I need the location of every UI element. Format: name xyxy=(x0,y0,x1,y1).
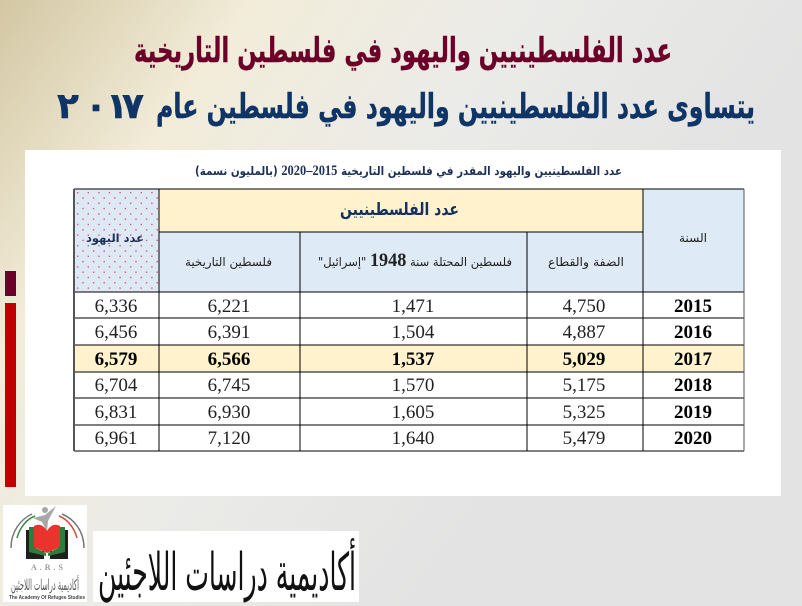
icon: open book xyxy=(26,525,68,559)
row 2018 xyxy=(95,375,712,396)
row 2017 highlighted: 6,566 xyxy=(208,349,250,370)
header cell: Jewish population xyxy=(74,189,159,292)
header cell: historic Palestine xyxy=(159,232,300,292)
row 2020: 6,961 xyxy=(95,428,137,449)
row 2016: 6,456 xyxy=(95,322,137,343)
row 2015: 4,750 xyxy=(563,296,605,317)
row 2020: 1,640 xyxy=(392,428,434,449)
row 2015: 6,336 xyxy=(95,296,137,317)
header cell: West Bank and Gaza: الضفة والقطاع xyxy=(548,255,624,270)
accent bar: maroon xyxy=(5,271,16,296)
row 2018: 1,570 xyxy=(392,375,434,396)
row 2017 highlighted: 2017 xyxy=(674,349,712,370)
row 2019: 5,325 xyxy=(563,402,605,423)
header cell: historic Palestine: فلسطين التاريخية xyxy=(185,255,272,270)
header cell: West Bank and Gaza xyxy=(527,232,643,292)
header cell: Jewish population: عدد اليهود xyxy=(86,231,144,246)
data table xyxy=(74,189,744,451)
row 2019: 6,831 xyxy=(95,402,137,423)
logo: academy emblem xyxy=(3,505,87,602)
title xyxy=(57,31,755,127)
row 2019: 6,930 xyxy=(208,402,250,423)
header cell: occupied 1948: فلسطين المحتلة سنة 1948 "إسرائيل" xyxy=(318,250,512,271)
row 2016: 1,504 xyxy=(392,322,435,343)
row 2018: 5,175 xyxy=(563,375,605,396)
row 2018: 2018 xyxy=(674,375,712,396)
row 2016: 4,887 xyxy=(563,322,605,343)
text: أكاديمية دراسات اللاجئين xyxy=(11,575,79,594)
row 2020: 2020 xyxy=(674,428,712,449)
row 2020: 5,479 xyxy=(563,428,605,449)
accent bars xyxy=(5,271,16,487)
panel: table card xyxy=(25,150,781,496)
emblem arcs xyxy=(11,514,84,548)
accent bar: red xyxy=(5,303,16,487)
row 2019: 2019 xyxy=(674,402,712,423)
header cell: number of Palestinians: عدد الفلسطينيين xyxy=(340,200,459,220)
row 2020 xyxy=(95,428,712,449)
logo initials: A.R.S xyxy=(31,563,64,572)
text: أكاديمية دراسات اللاجئين xyxy=(98,538,356,603)
row 2019: 1,605 xyxy=(392,402,434,423)
header cell: number of Palestinians xyxy=(159,189,643,232)
header cell: year: السنة xyxy=(679,231,707,245)
row 2017 highlighted: 1,537 xyxy=(392,349,435,370)
logo english name: The Academy Of Refugee Studies xyxy=(9,595,85,601)
header cell: year xyxy=(643,189,744,292)
row 2018: 6,704 xyxy=(95,375,138,396)
row 2016 xyxy=(95,322,712,343)
row 2015: 1,471 xyxy=(392,296,434,317)
title year digits: ٢٠١٧ xyxy=(57,86,144,127)
row 2018: 6,745 xyxy=(208,375,250,396)
logo: academy calligraphy xyxy=(93,531,359,603)
row 2015: 2015 xyxy=(674,296,712,317)
row 2020: 7,120 xyxy=(208,428,250,449)
header cell: occupied 1948 xyxy=(300,232,527,292)
row 2016: 2016 xyxy=(674,322,712,343)
emblem figure xyxy=(33,506,56,532)
row 2015 xyxy=(95,296,712,317)
highlighted row background xyxy=(74,345,744,372)
row 2017 highlighted: 6,579 xyxy=(95,349,137,370)
row 2019 xyxy=(95,402,712,423)
row 2016: 6,391 xyxy=(208,322,250,343)
row 2017 highlighted: 5,029 xyxy=(563,349,605,370)
row 2017 highlighted xyxy=(95,349,712,370)
row 2015: 6,221 xyxy=(208,296,250,317)
table caption: عدد الفلسطينيين واليهود المقدر في فلسطين التاريخية 2015–2020 (بالمليون نسمة) xyxy=(195,163,622,179)
